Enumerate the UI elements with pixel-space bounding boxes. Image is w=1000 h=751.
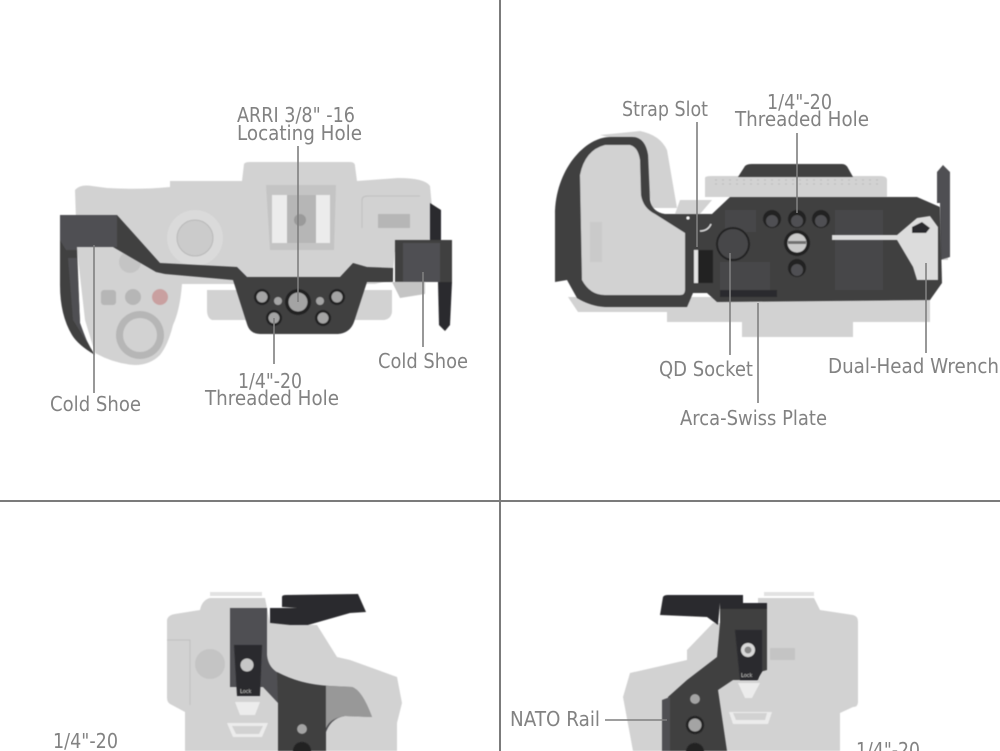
panel: left side view	[17, 592, 402, 751]
top plate and lever	[738, 164, 950, 260]
label: Arca-Swiss plate: Arca-Swiss Plate	[680, 406, 827, 430]
panel: top view	[50, 103, 468, 416]
label: left cold shoe: Cold Shoe	[50, 392, 141, 416]
grip and top plate	[230, 594, 372, 751]
lock block	[234, 645, 262, 696]
camera body left side	[167, 592, 402, 751]
dual-head wrench	[832, 216, 938, 280]
label: threaded hole	[734, 90, 869, 213]
label: ARRI locating hole	[237, 103, 362, 302]
label: threaded hole: Threaded Hole	[734, 107, 869, 131]
label: right cold shoe	[378, 272, 468, 373]
label: NATO rail: NATO Rail	[510, 707, 600, 731]
label: strap slot: Strap Slot	[622, 97, 708, 121]
lock block: Lock	[741, 673, 753, 679]
grip holes	[686, 694, 704, 751]
label: right cold shoe: Cold Shoe	[378, 349, 468, 373]
label: QD socket: QD Socket	[659, 357, 753, 381]
label: threaded hole: 1/4"-20	[767, 90, 832, 114]
label: threaded hole	[204, 318, 339, 410]
lock block	[735, 630, 762, 680]
grip holes	[293, 724, 311, 751]
camera body bottom view	[568, 131, 948, 337]
label: threaded hole: 1/4"-20	[238, 369, 302, 393]
label: QD socket	[659, 253, 753, 381]
bracket with threaded holes	[60, 215, 393, 355]
L-bracket plate	[555, 137, 942, 307]
camera body right side	[623, 592, 858, 751]
label: ARRI locating hole: Locating Hole	[237, 121, 362, 145]
label: threaded hole (clipped)	[17, 729, 152, 751]
lock block: Lock	[240, 689, 252, 695]
camera body top view	[75, 162, 432, 365]
panel: bottom view	[555, 90, 999, 430]
grip plate and top plate	[660, 595, 767, 751]
right cold shoe and lever	[392, 203, 452, 331]
label: ARRI locating hole: ARRI 3/8" -16	[237, 103, 355, 127]
label: threaded hole: Threaded Hole	[204, 386, 339, 410]
panel: right side view	[510, 592, 920, 751]
